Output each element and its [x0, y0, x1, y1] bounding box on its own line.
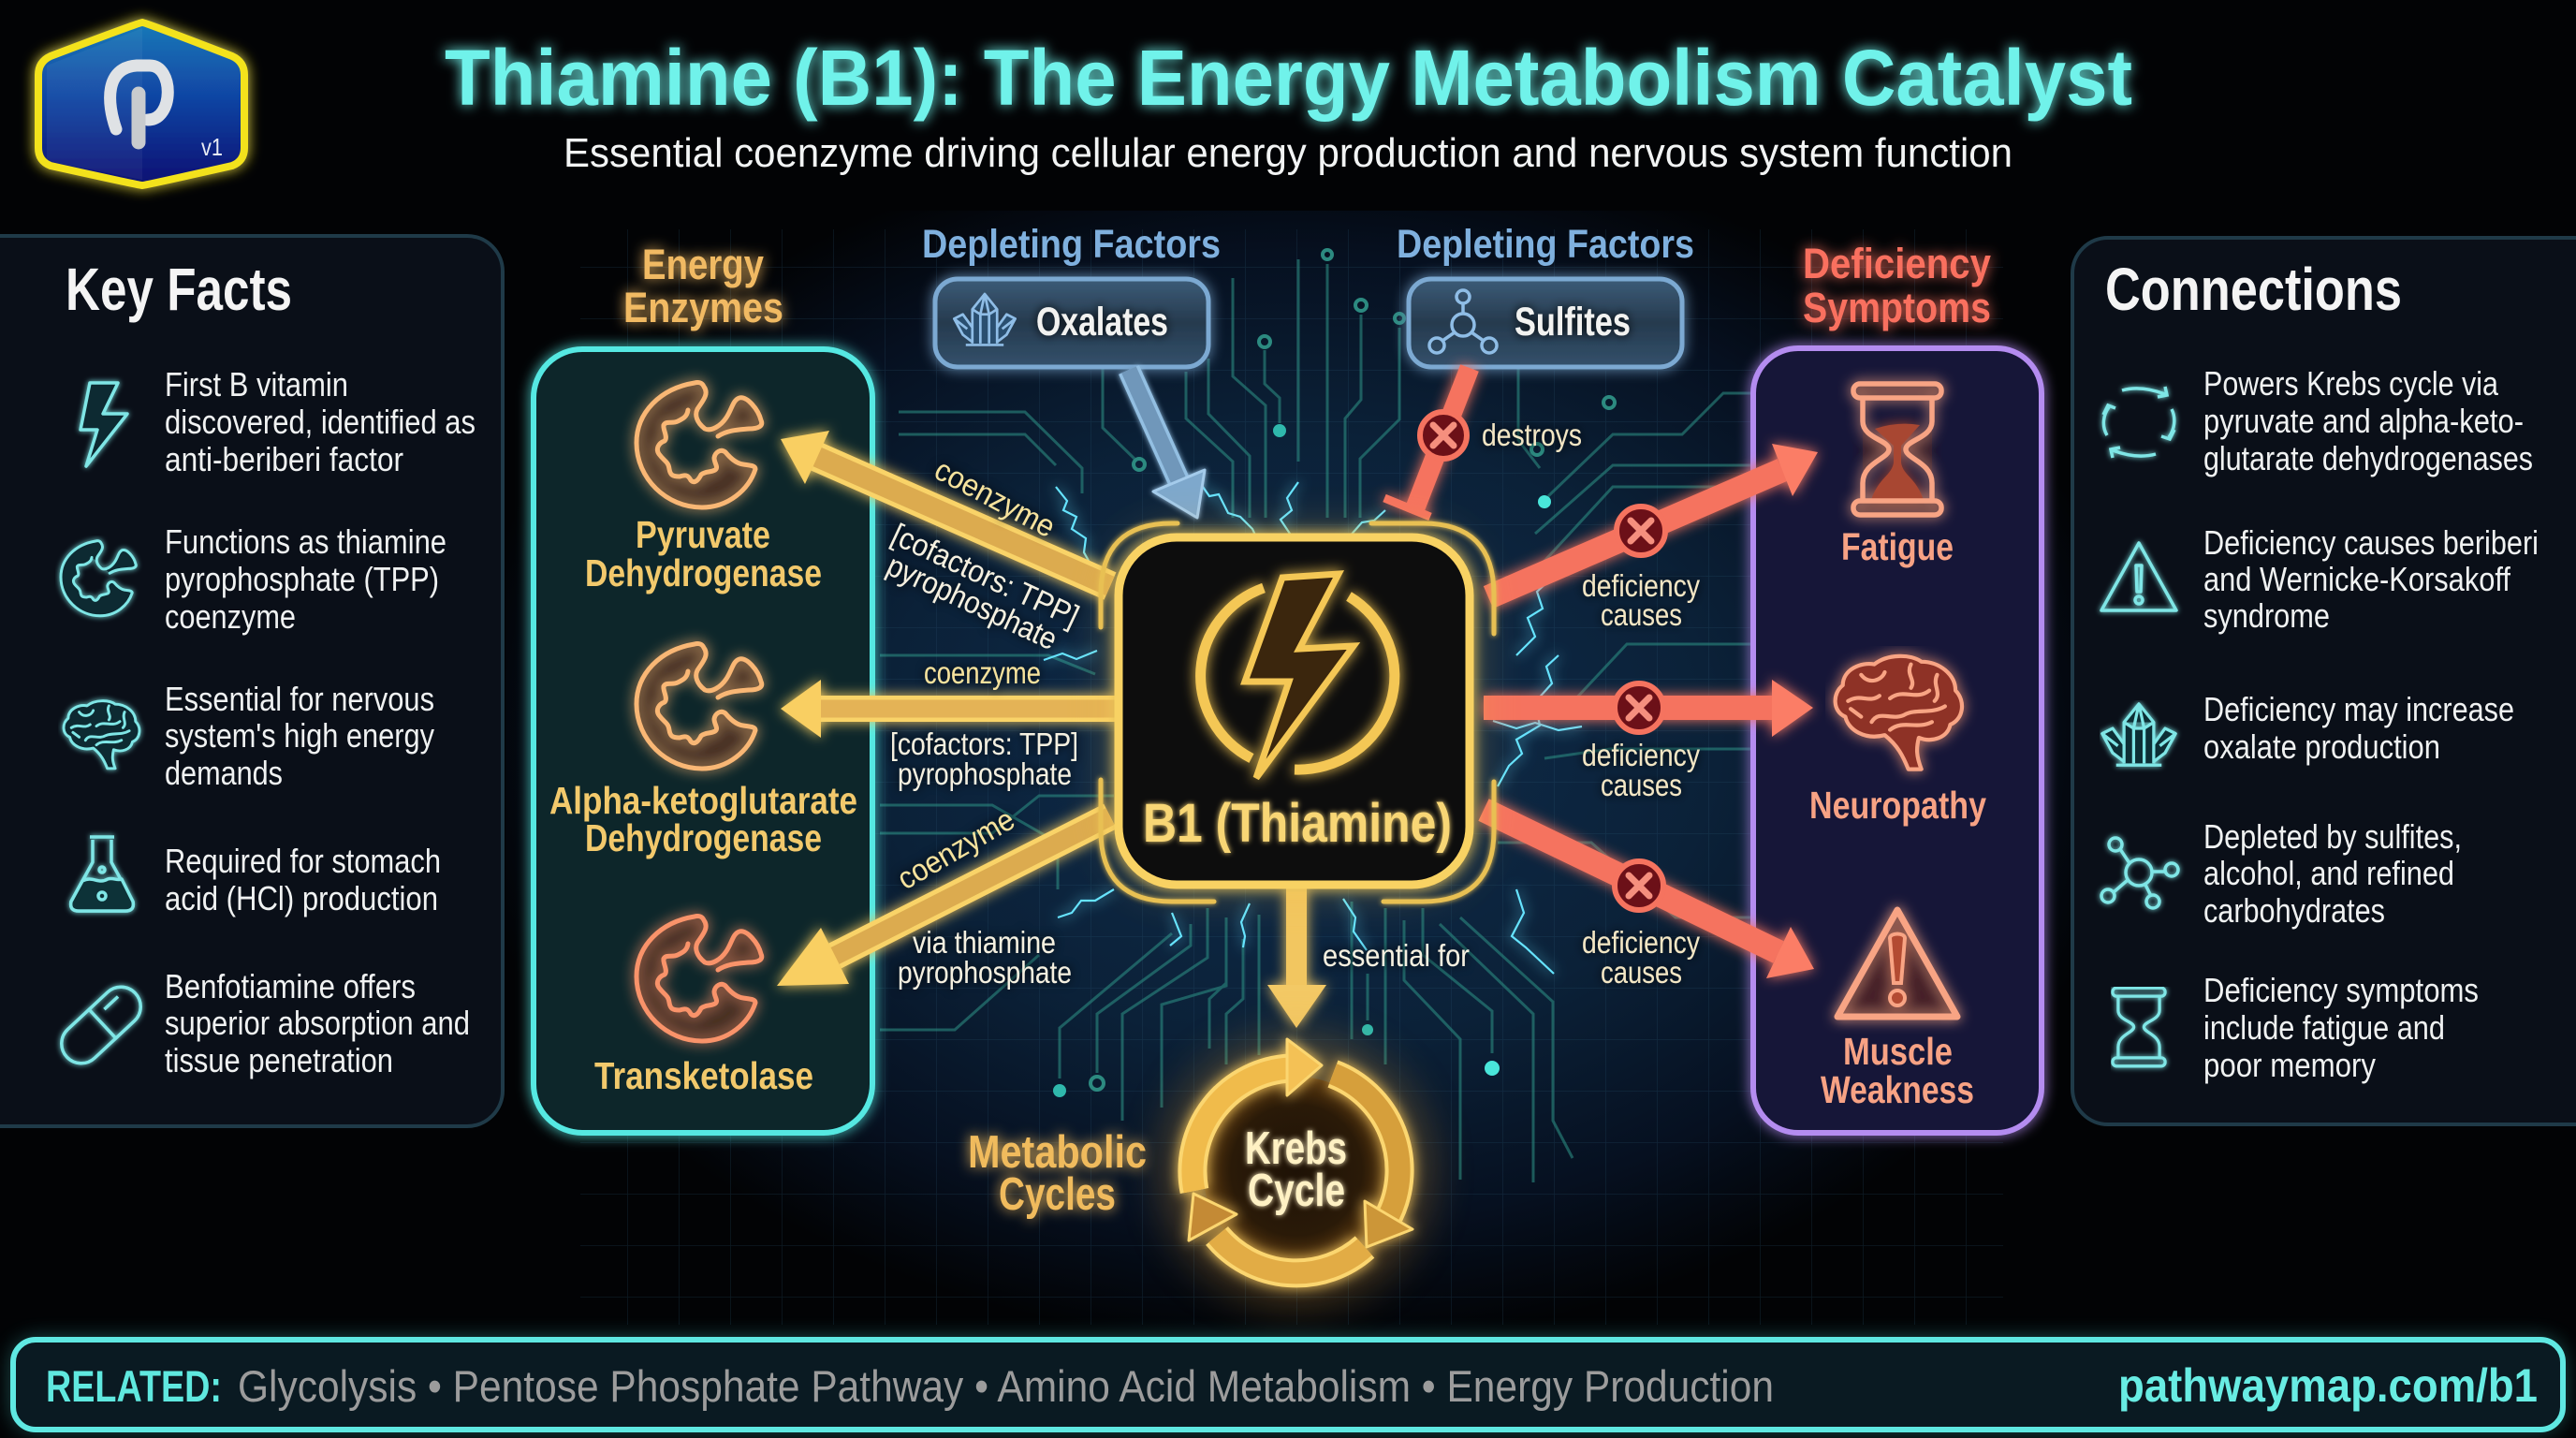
metabolic cycles heading: Metabolic [968, 1127, 1147, 1178]
connection 1: Powers Krebs cycle via [2203, 364, 2499, 403]
symptom: muscle weakness: Weakness [1821, 1068, 1974, 1111]
deficiency symptoms heading [1803, 240, 1991, 331]
connection 4: carbohydrates [2203, 891, 2385, 930]
enzyme: alpha-ketoglutarate dehydrogenase: Dehydrogenase [585, 816, 822, 859]
label: cofactors middle: pyrophosphate [898, 756, 1072, 791]
arrow: essential for krebs cycle [1267, 885, 1326, 1028]
fact 2: Functions as thiamine [165, 522, 446, 561]
label: deficiency causes: causes [1601, 597, 1682, 632]
panel: connections [2072, 238, 2576, 1124]
icon: molecule [1429, 290, 1497, 353]
depleting factors heading: sulfites: Depleting Factors [1397, 222, 1694, 267]
enzyme: pyruvate dehydrogenase: Dehydrogenase [585, 551, 822, 594]
arrow: deficiency causes neuropathy [1484, 680, 1813, 802]
connection 3: Deficiency may increase [2203, 690, 2514, 728]
arrow labels [882, 452, 1470, 990]
symptom: fatigue: Fatigue [1841, 525, 1954, 568]
enzyme: pyruvate dehydrogenase [585, 382, 822, 594]
label: coenzyme middle: coenzyme [924, 655, 1041, 690]
label: cofactors middle: [cofactors: TPP] [890, 726, 1078, 761]
connection 5: include fatigue and [2203, 1008, 2445, 1047]
connection 5: poor memory [2203, 1046, 2376, 1084]
fact 4: acid (HCl) production [165, 879, 438, 917]
energy enzymes heading: Enzymes [623, 284, 783, 331]
label: cofactors middle [890, 726, 1078, 791]
symptom: fatigue [1841, 384, 1954, 568]
metabolic cycles heading: Cycles [999, 1169, 1116, 1220]
arrow: coenzyme to alpha-ketoglutarate dehydrogenase [781, 680, 1119, 738]
connection 5 [2113, 971, 2479, 1084]
footer bar [13, 1340, 2563, 1430]
circuit nodes [1053, 250, 1615, 1097]
symptom: muscle weakness: Muscle [1843, 1030, 1953, 1073]
connection 4: Depleted by sulfites, [2203, 817, 2462, 856]
fact 4 [71, 837, 441, 917]
energy enzymes heading [623, 241, 783, 331]
inhibitor badge [1420, 412, 1467, 459]
logo mark [110, 66, 168, 142]
symptom: muscle weakness [1821, 910, 1974, 1111]
fact 3: demands [165, 754, 283, 792]
footer: related label: RELATED: [46, 1361, 222, 1411]
label: cofactors upper: [cofactors: TPP] [886, 517, 1084, 634]
label: via thiamine pyrophosphate [898, 925, 1072, 990]
arrow: coenzyme to pyruvate dehydrogenase [781, 431, 1110, 586]
label: deficiency causes: causes [1601, 955, 1682, 990]
lightning sparks [1044, 477, 1582, 974]
metabolic cycles heading [968, 1127, 1147, 1220]
panel: energy enzymes [534, 349, 872, 1133]
enzyme: transketolase [594, 916, 813, 1097]
arrow: deficiency causes muscle weakness [1484, 810, 1814, 990]
krebs cycle [1165, 1039, 1427, 1301]
depleting factor: sulfites [1409, 279, 1682, 367]
panel: deficiency symptoms [1753, 348, 2042, 1133]
enzyme: pyruvate dehydrogenase: Pyruvate [636, 513, 770, 556]
label: sulfites: Sulfites [1515, 300, 1631, 345]
logo version: v1 [201, 133, 223, 161]
symptom: neuropathy: Neuropathy [1809, 784, 1986, 827]
krebs cycle label [1245, 1123, 1347, 1216]
label: coenzyme upper: coenzyme [929, 452, 1061, 544]
label: coenzyme lower: coenzyme [891, 801, 1020, 896]
fact 2 [61, 522, 446, 636]
fact 5: Benfotiamine offers [165, 967, 416, 1005]
label: deficiency causes [1582, 738, 1700, 802]
fact 5: superior absorption and [165, 1004, 470, 1042]
fact 5 [53, 967, 470, 1079]
fact 4: Required for stomach [165, 842, 441, 880]
label: via thiamine pyrophosphate: via thiamine [913, 925, 1056, 960]
logo badge [38, 22, 244, 185]
connection 2 [2101, 523, 2539, 635]
connection 3: oxalate production [2203, 727, 2440, 766]
connection 5: Deficiency symptoms [2203, 971, 2479, 1009]
fact 1: First B vitamin [165, 365, 348, 404]
energy enzymes heading: Energy [642, 241, 764, 288]
label: deficiency causes: deficiency [1582, 568, 1700, 603]
label: destroys: destroys [1482, 418, 1582, 452]
central circuit backdrop [505, 211, 2078, 1339]
connection 2: syndrome [2203, 596, 2330, 635]
label: cofactors upper: pyrophosphate [882, 548, 1062, 656]
label: b1 thiamine: B1 (Thiamine) [1143, 793, 1452, 854]
krebs cycle label: Krebs [1245, 1123, 1347, 1174]
connection 1: pyruvate and alpha-keto- [2203, 402, 2524, 440]
deficiency symptoms heading: Deficiency [1803, 240, 1991, 287]
label: deficiency causes: causes [1601, 768, 1682, 802]
arrow: oxalates to b1 [1129, 370, 1205, 518]
inhibitor: sulfites destroys b1 [1384, 368, 1582, 517]
deficiency symptoms heading: Symptoms [1803, 284, 1991, 331]
connection 1 [2103, 364, 2533, 477]
label: via thiamine pyrophosphate: pyrophosphate [898, 955, 1072, 990]
arrow: coenzyme to transketolase [777, 816, 1110, 986]
fact 1: discovered, identified as [165, 403, 476, 441]
krebs cycle label: Cycle [1248, 1166, 1345, 1216]
label: essential for: essential for [1323, 938, 1470, 973]
depleting factors heading: oxalates: Depleting Factors [922, 222, 1221, 267]
fact 1: anti-beriberi factor [165, 440, 403, 478]
connection 4: alcohol, and refined [2203, 854, 2454, 892]
enzyme: alpha-ketoglutarate dehydrogenase [549, 643, 857, 859]
fact 5: tissue penetration [165, 1041, 393, 1079]
title: Thiamine (B1): The Energy Metabolism Catalyst [445, 34, 2132, 122]
fact 2: pyrophosphate (TPP) [165, 560, 439, 598]
symptom: neuropathy [1809, 656, 1986, 827]
subtitle: Essential coenzyme driving cellular energy production and nervous system function [564, 130, 2012, 176]
icon: crystal [954, 294, 1016, 345]
fact 2: coenzyme [165, 597, 296, 636]
circuit traces [880, 259, 1753, 1182]
arrow: deficiency causes fatigue [1488, 444, 1818, 632]
depleting factor: oxalates [935, 279, 1208, 367]
footer: url: pathwaymap.com/b1 [2118, 1359, 2538, 1412]
connection 4 [2101, 817, 2462, 930]
enzyme: alpha-ketoglutarate dehydrogenase: Alpha-ketoglutarate [549, 779, 857, 822]
fact 3: system's high energy [165, 716, 434, 755]
central node: b1 thiamine [1101, 523, 1494, 902]
fact 3: Essential for nervous [165, 680, 434, 718]
panel: key facts [0, 236, 503, 1126]
label: deficiency causes: deficiency [1582, 738, 1700, 772]
fact 1 [80, 365, 476, 478]
connection 3 [2102, 690, 2514, 766]
label: deficiency causes [1582, 568, 1700, 632]
connection 2: and Wernicke-Korsakoff [2203, 560, 2511, 598]
label: oxalates: Oxalates [1036, 300, 1168, 345]
footer: related topics: Glycolysis • Pentose Phosphate Pathway • Amino Acid Metabolism • Energy Production [238, 1361, 1774, 1411]
key facts heading: Key Facts [66, 256, 292, 323]
label: deficiency causes [1582, 925, 1700, 990]
enzyme: transketolase: Transketolase [594, 1054, 813, 1097]
fact 3 [64, 680, 434, 792]
label: deficiency causes: deficiency [1582, 925, 1700, 960]
icon: lightning bolt [1201, 574, 1395, 778]
connections heading: Connections [2105, 256, 2402, 323]
